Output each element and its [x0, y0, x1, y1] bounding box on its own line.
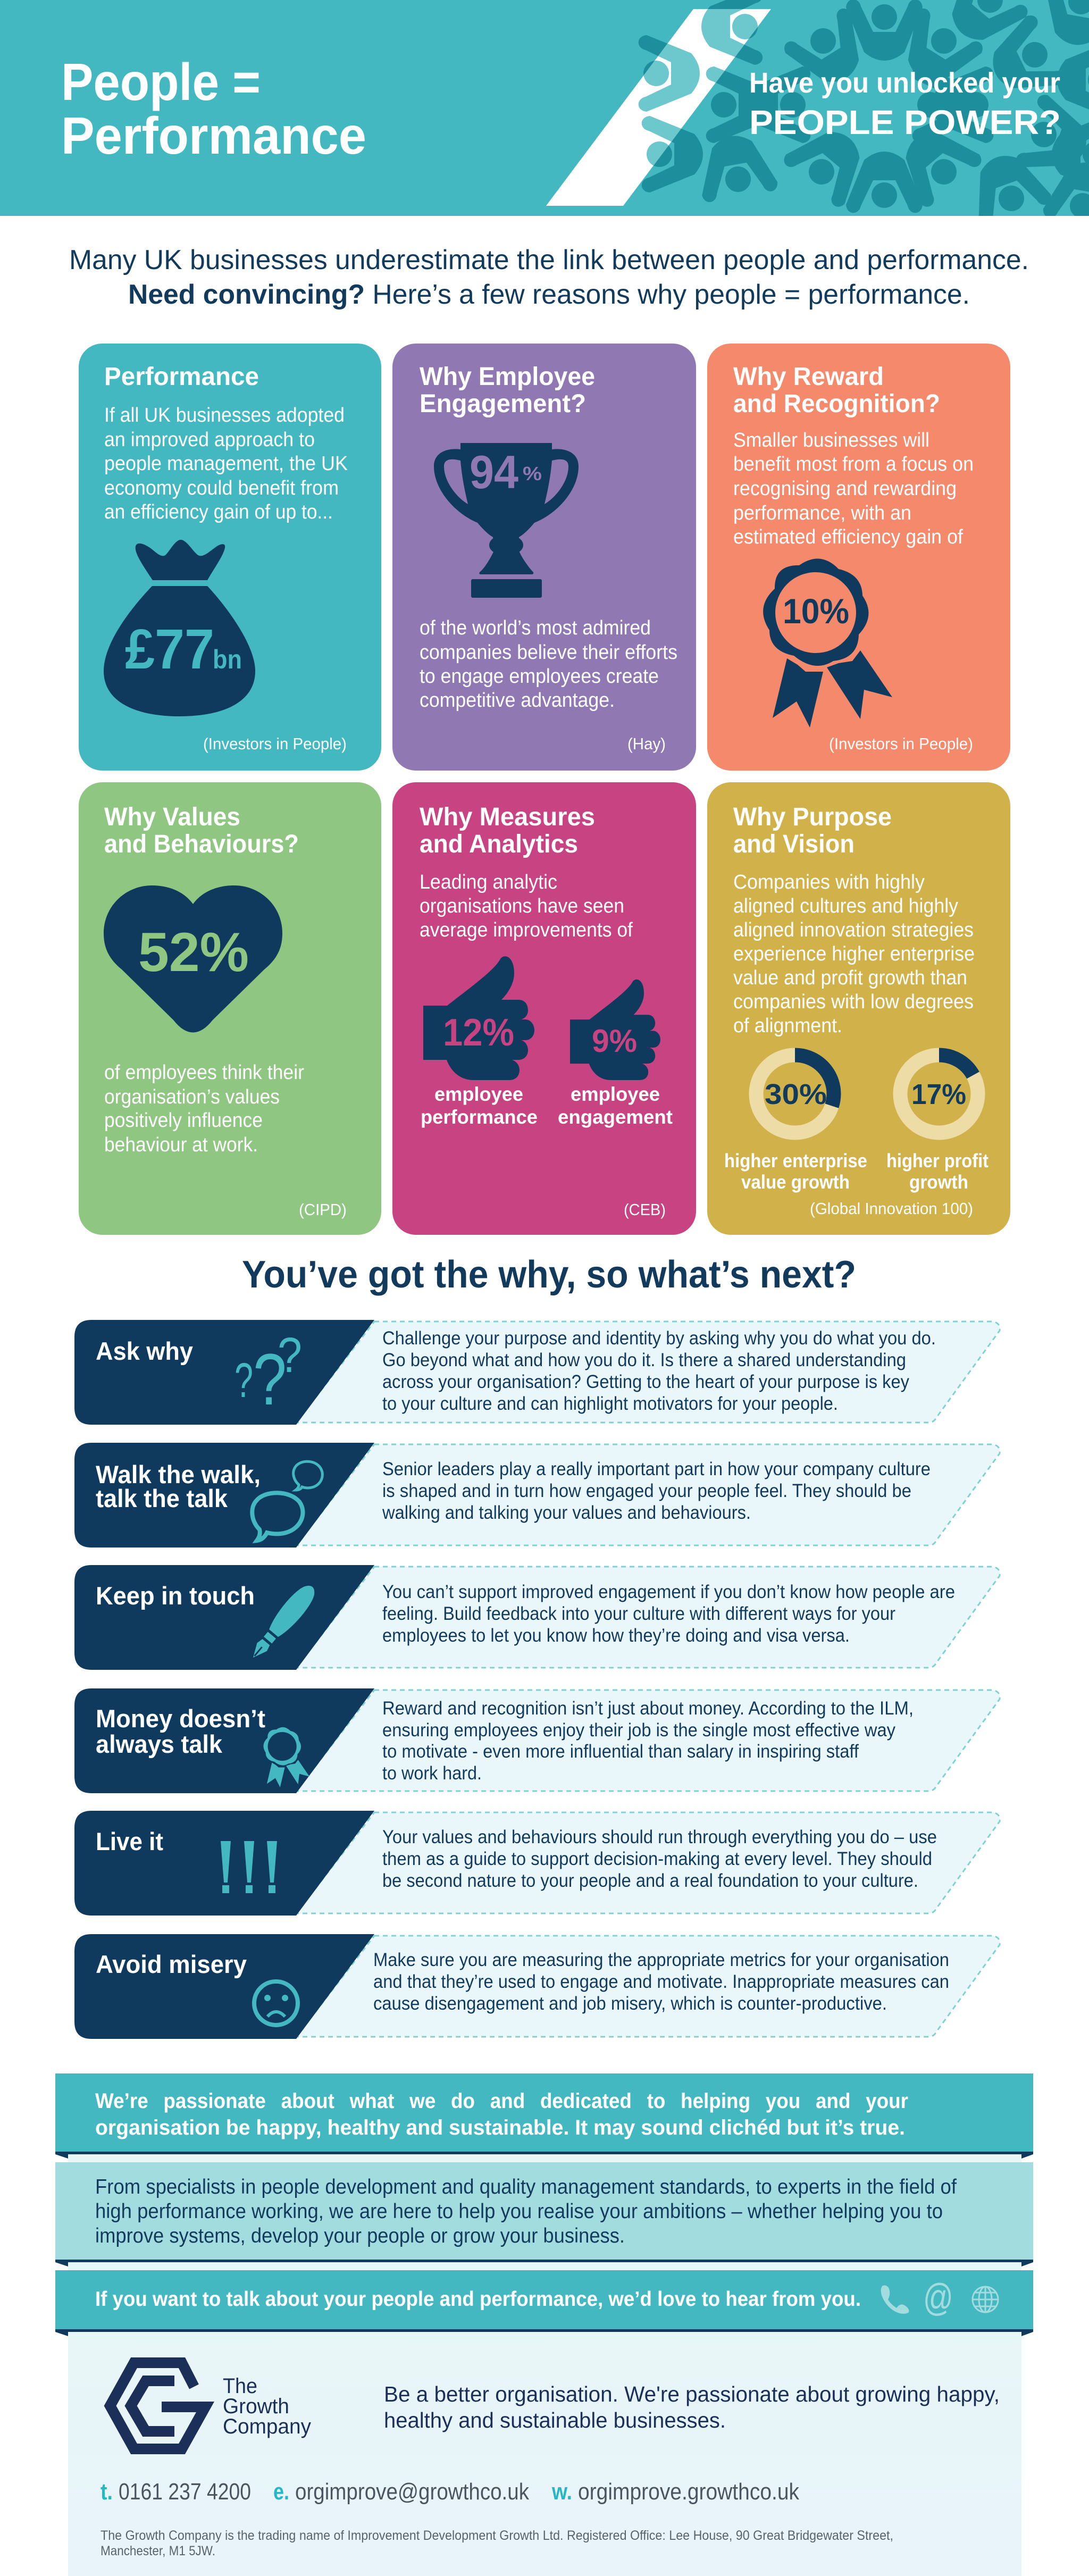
body text: Reward and recognition isn’t just about money. According to the ILM, [382, 1698, 914, 1719]
text: We’re passionate about what we do and dedicated to helping you and your [95, 2089, 908, 2113]
icon: globe [973, 2287, 998, 2312]
heading [104, 803, 299, 858]
heading: Why Employee [420, 363, 595, 391]
label: higher profit growth: growth [909, 1171, 968, 1193]
legal text [100, 2528, 893, 2558]
icon: thumb 12% [423, 956, 534, 1080]
white slash [546, 9, 771, 206]
body text: economy could benefit from [104, 477, 339, 499]
step: live it [74, 1811, 1000, 1916]
heading: Performance [104, 363, 259, 391]
label: Money doesn’t [96, 1704, 265, 1733]
label [96, 1460, 261, 1512]
legal text: The Growth Company is the trading name of Improvement Development Growth Ltd. Registered Office: Lee House, 90 Great Bridgewater Street, [100, 2528, 893, 2543]
intro text: Need convincing? Here’s a few reasons why people = performance. [128, 279, 970, 310]
people pattern [639, 0, 1089, 230]
text: If you want to talk about your people and performance, we’d love to hear from you. [95, 2288, 861, 2311]
label: Walk the walk, [96, 1460, 261, 1488]
body text [420, 871, 633, 941]
icon: at sign: @ [923, 2277, 953, 2319]
body text: an efficiency gain of up to... [104, 501, 333, 523]
text: high performance working, we are here to help you realise your ambitions – whether helping you to [95, 2200, 943, 2223]
source: (Hay) [627, 734, 666, 753]
body text [420, 617, 677, 712]
body text: them as a guide to support decision-making at every level. They should [382, 1849, 932, 1869]
icon: heart [104, 885, 282, 1033]
body text: Senior leaders play a really important part in how your company culture [382, 1459, 931, 1479]
icon: heart: 52% [138, 922, 249, 983]
icon: rosette [763, 559, 892, 727]
body text: cause disengagement and job misery, which is counter-productive. [373, 1993, 887, 2014]
heading [733, 363, 940, 418]
source: (CEB) [624, 1200, 666, 1219]
body text [382, 1459, 931, 1523]
contact details: w. [551, 2479, 572, 2505]
donut chart 30% [756, 1055, 834, 1133]
panel: employee engagement [392, 344, 696, 771]
body text [382, 1698, 914, 1784]
section heading: You’ve got the why, so what’s next? [242, 1253, 856, 1296]
body text [733, 429, 974, 548]
donut chart 17%: 17% [911, 1078, 966, 1110]
source: (CIPD) [299, 1200, 347, 1219]
body text: employees to let you know how they’re doing and visa versa. [382, 1625, 850, 1646]
label: higher profit growth [886, 1150, 989, 1193]
body text [382, 1827, 937, 1891]
text [95, 2089, 908, 2139]
body text: recognising and rewarding [733, 478, 957, 500]
body text: aligned innovation strategies [733, 919, 974, 941]
body text: estimated efficiency gain of [733, 526, 963, 548]
header tagline: PEOPLE POWER? [749, 103, 1061, 141]
header banner [0, 0, 1089, 230]
body text [104, 404, 348, 523]
heading: Engagement? [420, 390, 586, 418]
body text: walking and talking your values and behaviours. [382, 1502, 751, 1523]
logo wordmark: Growth [223, 2395, 289, 2418]
body text: Smaller businesses will [733, 429, 929, 451]
body text: and that they’re used to engage and motivate. Inappropriate measures can [373, 1971, 949, 1992]
label: employee performance: performance [421, 1106, 538, 1128]
body text: companies with low degrees [733, 991, 974, 1013]
icon: exclamation marks [221, 1841, 277, 1893]
heading: and Analytics [420, 830, 578, 858]
body text: companies believe their efforts [420, 641, 677, 664]
body text: Your values and behaviours should run through everything you do – use [382, 1827, 937, 1847]
icon: question marks [234, 1327, 302, 1420]
body text [733, 871, 975, 1037]
donut chart 17% [900, 1055, 978, 1133]
logo wordmark: Company [223, 2415, 311, 2438]
header tagline: Have you unlocked your [749, 67, 1060, 99]
icon: fountain pen [245, 1580, 320, 1664]
step: walk the walk [74, 1443, 1000, 1548]
label: always talk [96, 1730, 223, 1758]
step: keep in touch [74, 1565, 1000, 1670]
body text: Challenge your purpose and identity by asking why you do what you do. [382, 1328, 936, 1349]
contact details: orgimprove@growthco.uk [295, 2479, 530, 2505]
text [95, 2176, 957, 2247]
heading: Why Purpose [733, 803, 892, 831]
source: (Global Innovation 100) [810, 1199, 973, 1218]
body text [382, 1582, 955, 1646]
label [96, 1704, 265, 1758]
body text: to your culture and can highlight motivators for your people. [382, 1393, 838, 1414]
intro text [69, 245, 1029, 310]
panel: measures and analytics [392, 782, 696, 1235]
intro text: Many UK businesses underestimate the link between people and performance. [69, 245, 1029, 275]
contact details [100, 2479, 800, 2505]
label: Keep in touch [96, 1582, 255, 1610]
body text: Go beyond what and how you do it. Is there a shared understanding [382, 1350, 906, 1370]
body text: competitive advantage. [420, 689, 615, 712]
label: higher enterprise value growth: higher enterprise [724, 1150, 867, 1172]
label: higher enterprise value growth [724, 1150, 867, 1193]
icon: sad face [254, 1981, 298, 2025]
body text: of alignment. [733, 1015, 842, 1037]
body text: an improved approach to [104, 429, 315, 451]
icon: speech bubbles [252, 1461, 322, 1541]
body text: be second nature to your people and a real foundation to your culture. [382, 1870, 918, 1891]
title: Performance [61, 106, 366, 165]
body text: organisation’s values [104, 1086, 280, 1108]
heading [733, 803, 892, 858]
icon: trophy: % [523, 463, 542, 484]
body text: ensuring employees enjoy their job is the single most effective way [382, 1720, 895, 1741]
panel: performance [79, 344, 381, 771]
label: talk the talk [96, 1484, 228, 1512]
label: Avoid misery [96, 1950, 247, 1978]
body text: people management, the UK [104, 453, 348, 475]
band: passion statement [55, 2073, 1033, 2159]
icon: thumb 12%: 12% [443, 1011, 514, 1054]
body text [373, 1950, 949, 2014]
band: specialists [55, 2162, 1033, 2266]
body text: across your organisation? Getting to the heart of your purpose is key [382, 1371, 909, 1392]
band: contact call to action [55, 2270, 1033, 2336]
icon: thumb 9%: 9% [592, 1023, 637, 1059]
icon: small rosette [263, 1727, 309, 1787]
label: higher profit growth: higher profit [886, 1150, 989, 1172]
text: organisation be happy, healthy and sustainable. It may sound clichéd but it’s true. [95, 2116, 905, 2139]
step: avoid misery [74, 1934, 1000, 2039]
logo mark [110, 2363, 205, 2449]
heading [420, 803, 595, 858]
icon: question marks: ? [253, 1339, 287, 1420]
body text: value and profit growth than [733, 967, 967, 989]
source: (Investors in People) [829, 734, 973, 753]
body text: is shaped and in turn how engaged your people feel. They should be [382, 1481, 911, 1501]
body text: aligned cultures and highly [733, 895, 958, 917]
heading: and Vision [733, 830, 855, 858]
label: higher enterprise value growth: value growth [741, 1171, 850, 1193]
logo: The Growth Company [110, 2363, 311, 2449]
icon: trophy: 94 [470, 446, 518, 498]
body text: to work hard. [382, 1763, 482, 1784]
tagline: Be a better organisation. We're passionate about growing happy, [384, 2382, 1000, 2406]
body text: organisations have seen [420, 895, 624, 917]
icon: trophy [434, 443, 579, 598]
text: improve systems, develop your people or grow your business. [95, 2224, 625, 2247]
icon: money bag: bn [213, 645, 242, 674]
icon: rosette: 10% [783, 591, 849, 631]
body text: to engage employees create [420, 665, 659, 688]
header tagline [749, 67, 1061, 141]
panel: values and behaviours [79, 782, 381, 1235]
body text: to motivate - even more influential than salary in inspiring staff [382, 1741, 859, 1762]
text: From specialists in people development and quality management standards, to experts in the field of [95, 2176, 957, 2198]
logo wordmark: The [223, 2374, 257, 2398]
body text: Make sure you are measuring the appropriate metrics for your organisation [373, 1950, 949, 1970]
icon: money bag: £77 [125, 618, 214, 681]
icon: phone [881, 2285, 909, 2314]
body text: experience higher enterprise [733, 943, 975, 965]
step: ask why [74, 1320, 1000, 1425]
people pattern on slash [638, 9, 758, 166]
icon: thumb 9% [570, 980, 660, 1080]
step: money doesn't always talk [74, 1688, 1000, 1793]
label: employee engagement: engagement [558, 1106, 673, 1128]
footer panel [68, 2152, 1021, 2576]
contact details: orgimprove.growthco.uk [578, 2479, 800, 2505]
body text: If all UK businesses adopted [104, 404, 345, 426]
contact details: e. [273, 2479, 289, 2505]
body text: performance, with an [733, 502, 911, 524]
heading: and Recognition? [733, 390, 940, 418]
body text: average improvements of [420, 919, 633, 941]
body text: of the world’s most admired [420, 617, 651, 639]
contact details: t. [100, 2479, 113, 2505]
icon: question marks: ? [234, 1353, 253, 1408]
label: employee engagement [558, 1083, 673, 1128]
heading [420, 363, 595, 418]
label: Ask why [96, 1337, 193, 1365]
source: (Investors in People) [203, 734, 347, 753]
body text: feeling. Build feedback into your culture with different ways for your [382, 1603, 895, 1624]
title [61, 53, 366, 165]
heading: Why Reward [733, 363, 884, 391]
panel: reward and recognition [707, 344, 1010, 771]
body text: of employees think their [104, 1061, 304, 1084]
body text: You can’t support improved engagement if you don’t know how people are [382, 1582, 955, 1602]
label: employee engagement: employee [571, 1083, 660, 1105]
body text: positively influence [104, 1109, 263, 1132]
title: People = [61, 53, 261, 111]
body text: benefit most from a focus on [733, 453, 974, 475]
legal text: Manchester, M1 5JW. [100, 2544, 215, 2558]
label: Live it [96, 1827, 163, 1855]
label: employee performance [421, 1083, 538, 1128]
body text: behaviour at work. [104, 1134, 258, 1156]
icon: money bag [104, 540, 255, 716]
body text [382, 1328, 936, 1414]
logo wordmark [223, 2374, 311, 2438]
contact details: 0161 237 4200 [119, 2479, 251, 2505]
donut chart 30%: 30% [765, 1078, 827, 1110]
panel: purpose and vision [707, 782, 1010, 1235]
heading: Why Values [104, 803, 240, 831]
label: employee performance: employee [434, 1083, 523, 1105]
body text: Companies with highly [733, 871, 925, 893]
heading: Why Measures [420, 803, 595, 831]
tagline: healthy and sustainable businesses. [384, 2408, 726, 2432]
body text: Leading analytic [420, 871, 557, 893]
icon: question marks: ? [278, 1327, 302, 1383]
tagline [384, 2382, 1000, 2432]
heading: and Behaviours? [104, 830, 299, 858]
body text [104, 1061, 304, 1156]
